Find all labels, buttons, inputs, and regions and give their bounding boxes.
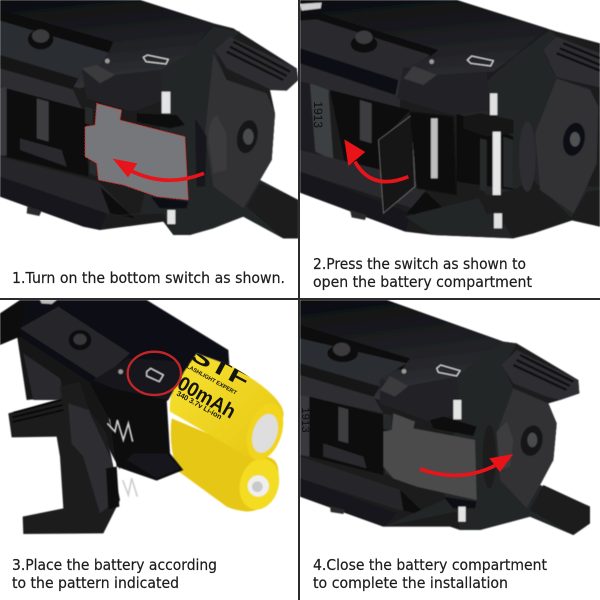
caption 4: 4.Close the battery compartment (313, 556, 547, 574)
caption 3: 3.Place the battery according (12, 556, 217, 574)
panel 2: press the switch (300, 0, 600, 240)
batteries: 340 3.7v Li-ion (175, 389, 224, 421)
detached end cap (8, 382, 137, 534)
batteries: LASHLIGHT EXPERT (185, 364, 238, 397)
caption 2: 2.Press the switch as shown to (313, 255, 526, 273)
label fragment 1913: 1913 (299, 407, 311, 433)
batteries: 00mAh (174, 373, 239, 423)
caption 1: 1.Turn on the bottom switch as shown. (12, 269, 285, 287)
caption 3: to the pattern indicated (12, 574, 179, 592)
panel 4: close the battery compartment (299, 300, 591, 536)
caption 2 (313, 255, 532, 291)
closed door (383, 413, 477, 500)
batteries (169, 353, 284, 512)
batteries: STF (186, 342, 254, 393)
red arrow (113, 159, 204, 180)
label 1913: 1913 (311, 101, 325, 128)
panel 1: turn on the bottom switch (0, 0, 298, 240)
caption 2: open the battery compartment (313, 273, 532, 291)
flashlight body (0, 300, 229, 481)
switch door highlighted in red (85, 103, 188, 200)
caption 4 (313, 556, 547, 592)
caption 3 (12, 556, 217, 592)
open battery door (378, 112, 457, 213)
red arrow (420, 454, 513, 475)
panel 3: place the battery (0, 300, 284, 535)
caption 4: to complete the installation (313, 574, 508, 592)
red circle highlight (128, 352, 181, 395)
red arrow (344, 139, 408, 182)
